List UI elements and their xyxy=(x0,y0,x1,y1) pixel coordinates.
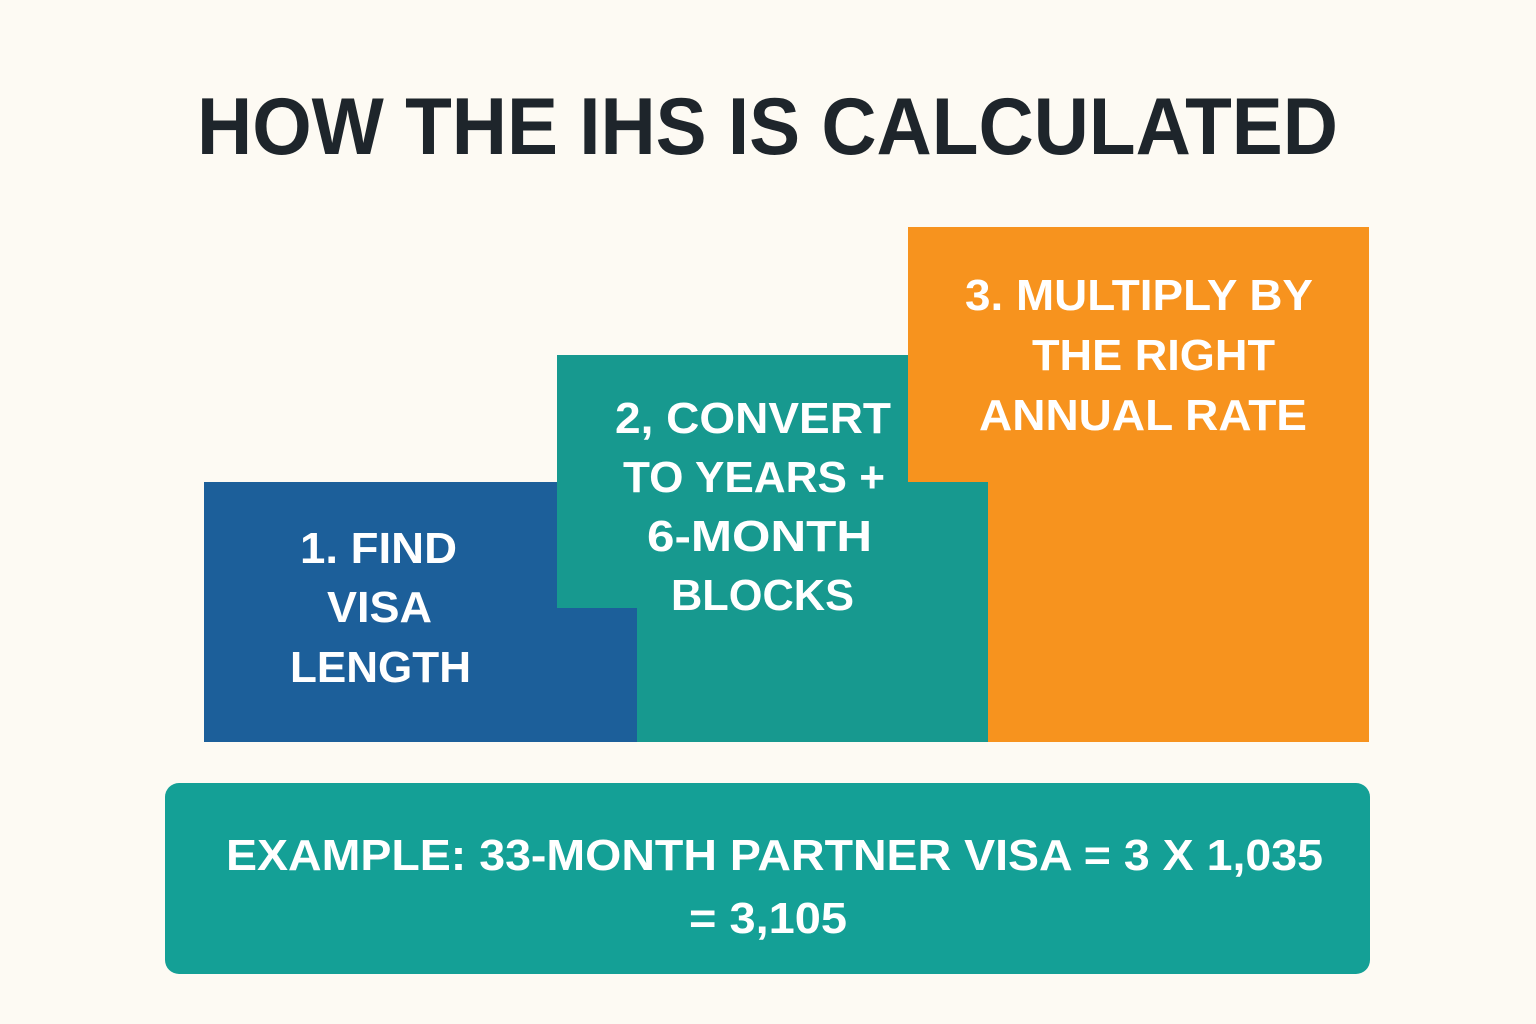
panel: step 2 teal: TO YEARS + xyxy=(623,453,885,502)
title: HOW THE IHS IS CALCULATED xyxy=(197,82,1338,172)
panel: step 3 orange: 3. MULTIPLY BY xyxy=(965,271,1313,320)
panel: step 1 blue: VISA xyxy=(327,583,432,632)
panel: step 3 orange xyxy=(908,227,1369,742)
callout: example xyxy=(165,783,1370,974)
panel: step 2 teal: 2, CONVERT xyxy=(615,394,891,443)
panel: step 3 orange: THE RIGHT xyxy=(1032,331,1275,380)
panel: step 2 teal: 6-MONTH xyxy=(647,512,872,561)
panel: step 1 blue: 1. FIND xyxy=(300,524,457,573)
panel: step 2 teal: BLOCKS xyxy=(671,571,854,620)
callout: example: EXAMPLE: 33-MONTH PARTNER VISA = 3 X 1,035 xyxy=(226,831,1323,880)
panel: step 3 orange: ANNUAL RATE xyxy=(979,391,1307,440)
callout: example: = 3,105 xyxy=(689,894,847,943)
panel: step 1 blue xyxy=(204,482,637,742)
panel: step 1 blue: LENGTH xyxy=(290,643,471,692)
panel: step 2 teal xyxy=(557,355,988,742)
